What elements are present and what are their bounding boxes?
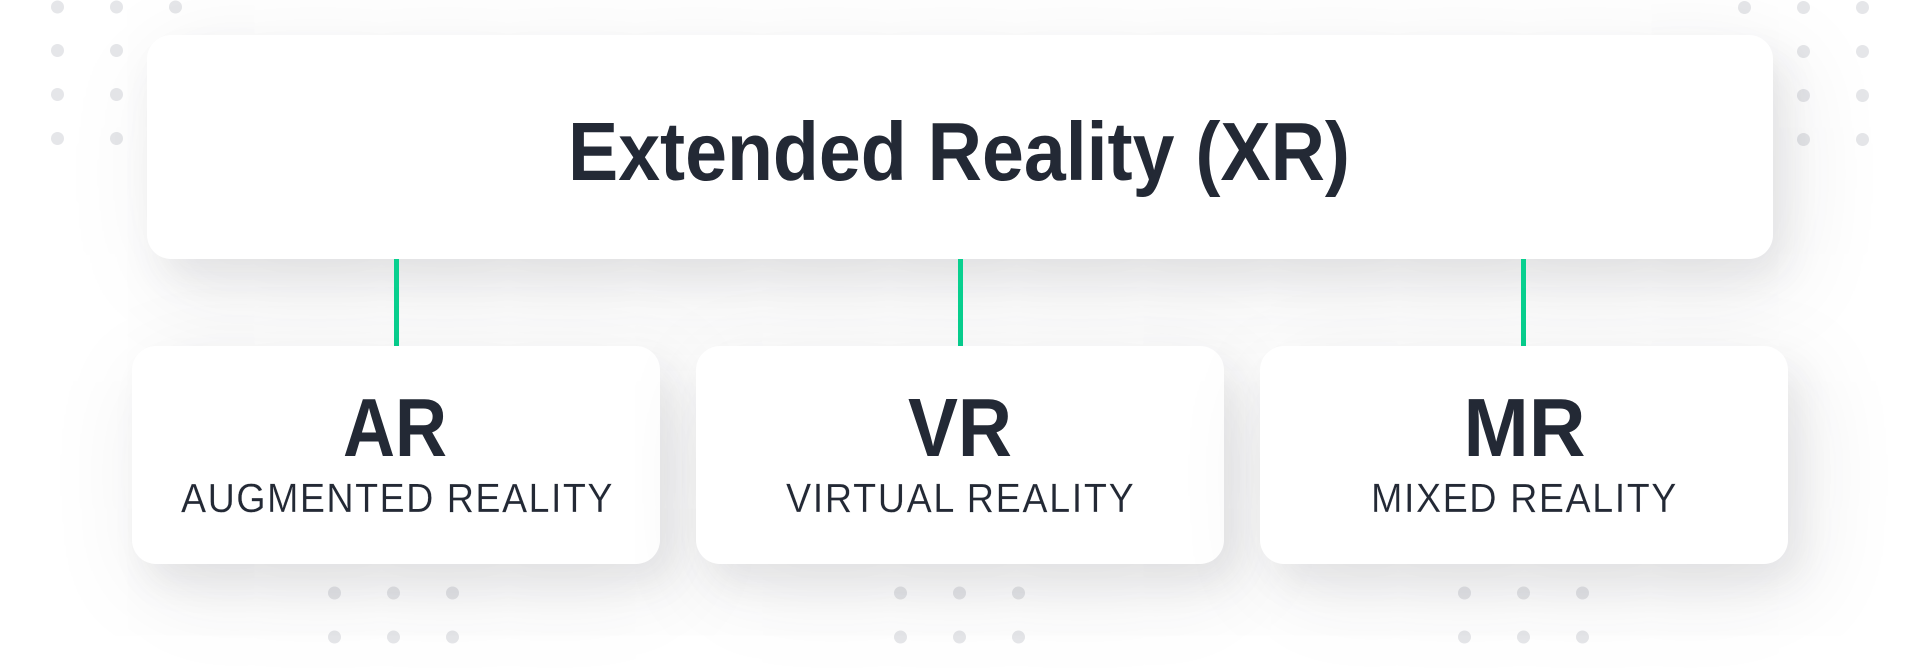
MR heading and subtitle: MR [1464, 381, 1586, 474]
panel: AR card [132, 346, 660, 564]
AR heading and subtitle [181, 381, 612, 521]
panel: MR card [1260, 346, 1788, 564]
panel: Extended Reality heading [147, 35, 1773, 259]
title: Extended Reality (XR) [568, 105, 1350, 198]
VR heading and subtitle [786, 381, 1134, 521]
VR heading and subtitle: VIRTUAL REALITY [786, 476, 1134, 521]
connector: XR to AR [394, 259, 399, 346]
MR heading and subtitle: MIXED REALITY [1371, 476, 1676, 521]
panel: VR card [696, 346, 1224, 564]
connector: XR to VR [958, 259, 963, 346]
AR heading and subtitle: AUGMENTED REALITY [181, 476, 612, 521]
MR heading and subtitle [1371, 381, 1676, 521]
connector: XR to MR [1521, 259, 1526, 346]
AR heading and subtitle: AR [343, 381, 447, 474]
VR heading and subtitle: VR [908, 381, 1012, 474]
